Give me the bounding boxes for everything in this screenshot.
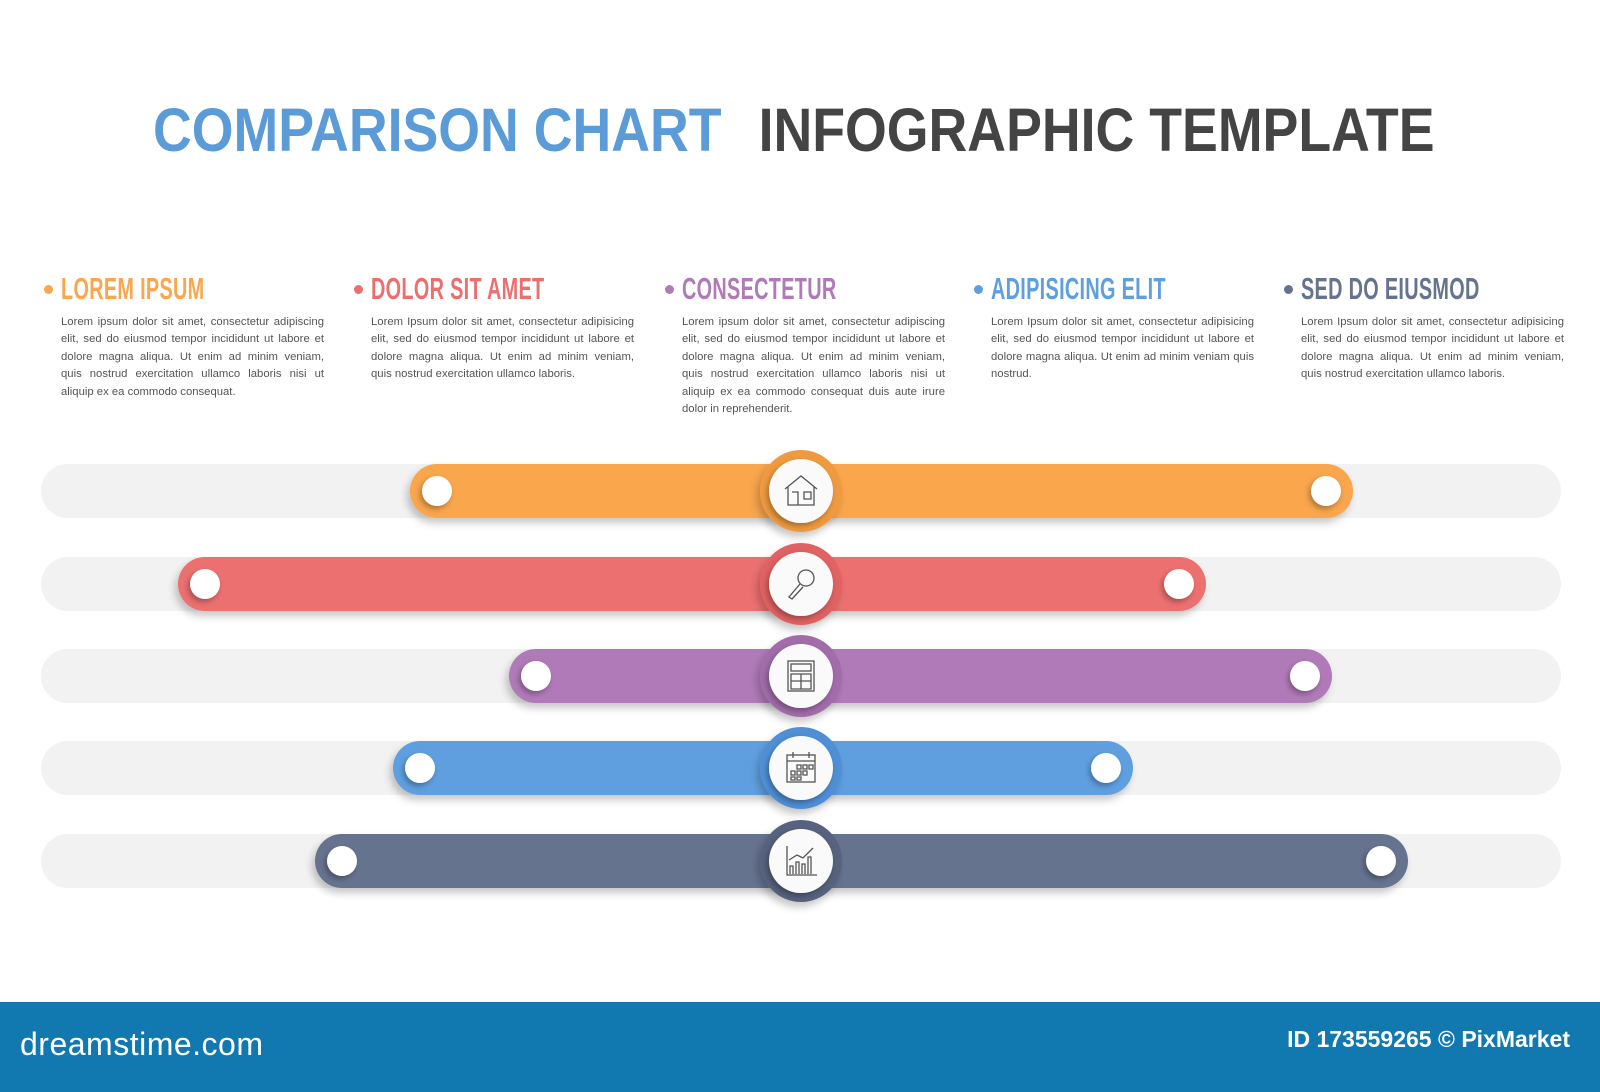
icon: calculator xyxy=(760,635,842,717)
column: consectetur: Lorem ipsum dolor sit amet, consectetur adipiscing elit, sed do eiusmod tempor incididunt ut labore et dolore magna aliqua. Ut enim ad minim veniam, quis nostrud exercitation ullamco laboris nisi ut aliquip ex ea commodo consequat duis aute irure dolor in reprehenderit. xyxy=(682,316,945,415)
column: sed do eiusmod: Lorem Ipsum dolor sit amet, consectetur adipisicing elit, sed do eiusmod tempor incididunt ut labore et dolore magna aliqua. Ut enim ad minim veniam, quis nostrud exercitation ullamco laboris. xyxy=(1301,316,1564,380)
bar: blue xyxy=(393,741,1133,795)
tracks xyxy=(41,464,1561,888)
bar: red xyxy=(178,557,1206,611)
bar: orange xyxy=(410,464,1353,518)
bar: purple xyxy=(509,649,1332,703)
footer logo: dreamstime.com xyxy=(20,1026,264,1062)
column: dolor sit amet xyxy=(354,271,634,380)
column: lorem ipsum: LOREM IPSUM xyxy=(61,271,205,306)
icon: calendar xyxy=(760,727,842,809)
column: consectetur xyxy=(665,271,945,415)
column: sed do eiusmod xyxy=(1284,271,1564,380)
column: adipisicing elit: ADIPISICING ELIT xyxy=(991,271,1166,306)
footer id: ID 173559265 © PixMarket xyxy=(1287,1026,1570,1052)
column: lorem ipsum: Lorem ipsum dolor sit amet, consectetur adipiscing elit, sed do eiusmod tempor incididunt ut labore et dolore magna aliqua. Ut enim ad minim veniam, quis nostrud exercitation ullamco laboris nisi ut aliquip ex ea commodo consequat. xyxy=(61,316,324,398)
column: adipisicing elit xyxy=(974,271,1254,380)
icon: chart xyxy=(760,820,842,902)
column: dolor sit amet: DOLOR SIT AMET xyxy=(371,271,544,306)
icon: house xyxy=(760,450,842,532)
column: sed do eiusmod: SED DO EIUSMOD xyxy=(1301,271,1480,306)
bar: navy xyxy=(315,834,1408,888)
column: adipisicing elit: Lorem Ipsum dolor sit amet, consectetur adipisicing elit, sed do eiusmod tempor incididunt ut labore et dolore magna aliqua. Ut enim ad minim veniam quis nostrud. xyxy=(991,316,1254,380)
icon: magnifier xyxy=(760,543,842,625)
column: consectetur: CONSECTETUR xyxy=(682,271,837,306)
column: dolor sit amet: Lorem Ipsum dolor sit amet, consectetur adipisicing elit, sed do eiusmod tempor incididunt ut labore et dolore magna aliqua. Ut enim ad minim veniam, quis nostrud exercitation ullamco laboris. xyxy=(371,316,634,380)
column: lorem ipsum xyxy=(44,271,324,398)
title: COMPARISON CHART INFOGRAPHIC TEMPLATE xyxy=(153,96,1435,164)
footer xyxy=(0,1002,1600,1092)
